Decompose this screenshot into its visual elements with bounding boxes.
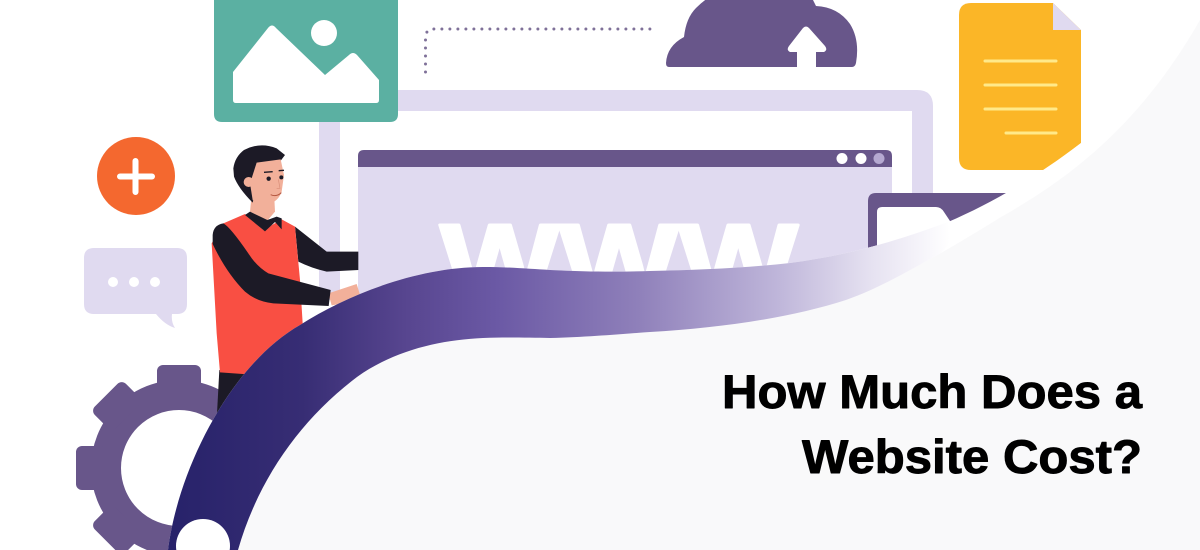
hand: [328, 284, 362, 305]
icon: upload cloud: [666, 0, 857, 67]
collar: [245, 212, 282, 231]
browser title bar: [358, 150, 892, 167]
icon: gear: [76, 365, 282, 550]
icon: speech bubble: [84, 248, 187, 328]
title line 2: Website Cost?: [802, 430, 1142, 483]
icon: plus circle: [97, 137, 175, 215]
ear: [244, 177, 254, 187]
mountains: [233, 26, 379, 103]
hair: [233, 145, 285, 203]
trousers: [217, 370, 250, 420]
facial features: [264, 170, 284, 196]
neck: [250, 192, 275, 221]
far arm: [295, 227, 358, 272]
browser body: [358, 160, 892, 310]
small folder window: [868, 193, 1020, 300]
dotted connector: [426, 29, 656, 72]
www lettering: WWW: [440, 203, 799, 318]
icon: document: [959, 3, 1081, 170]
image tile: [214, 0, 398, 122]
title: [722, 365, 1143, 483]
grey background panel: [238, 20, 1200, 550]
vest: [212, 214, 303, 378]
person: [212, 145, 362, 420]
browser window: [358, 150, 892, 318]
document lines: [985, 61, 1056, 133]
near arm: [213, 223, 331, 306]
page fold: [1053, 3, 1081, 30]
window dots: [836, 153, 884, 164]
monitor frame: [319, 90, 933, 300]
purple swoosh ribbon: [168, 222, 950, 550]
face: [250, 159, 284, 204]
white circle: [176, 519, 230, 550]
title line 1: How Much Does a: [722, 365, 1143, 418]
sun: [311, 20, 337, 46]
